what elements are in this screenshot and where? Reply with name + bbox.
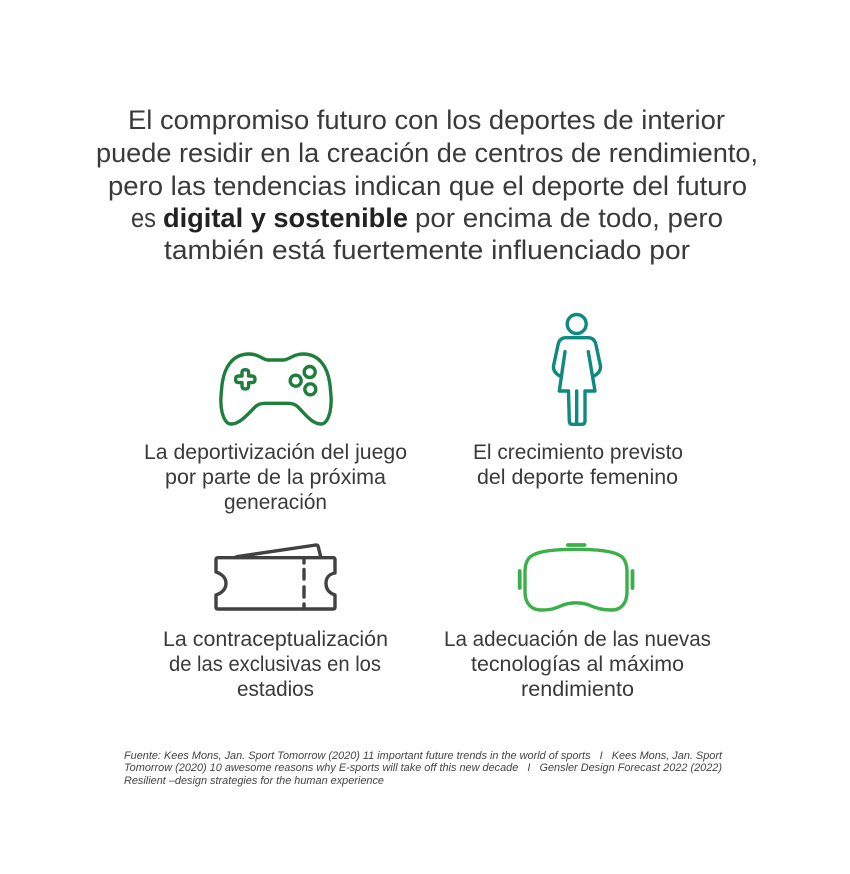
label: new technologies: rendimiento: [521, 678, 634, 701]
title paragraph: también está fuertemente influenciado por: [164, 235, 690, 265]
label: stadium exclusives: La contraceptualización: [163, 628, 388, 651]
icon: VR headset: [520, 545, 632, 610]
icon: ticket: [216, 545, 335, 609]
source footnote: Fuente: Kees Mons, Jan. Sport Tomorrow (2020) 11 important future trends in the world of sports I Kees Mons, Jan. Sport: [124, 750, 723, 762]
label: game generation: generación: [224, 491, 327, 514]
source footnote: Resilient –design strategies for the human experience: [124, 775, 384, 787]
label: game generation: por parte de la próxima: [165, 466, 386, 489]
label: women's sport: El crecimiento previsto: [473, 441, 683, 464]
title paragraph: por encima de todo, pero: [415, 203, 723, 233]
label: new technologies: [444, 628, 711, 701]
title paragraph: [96, 105, 758, 265]
title paragraph: pero las tendencias indican que el deporte del futuro: [108, 171, 747, 201]
title paragraph: es: [131, 203, 156, 233]
label: women's sport: [473, 441, 683, 489]
icon: game controller: [221, 354, 331, 424]
source footnote: [124, 750, 723, 787]
label: stadium exclusives: estadios: [237, 678, 314, 701]
label: women's sport: del deporte femenino: [477, 466, 678, 489]
title paragraph: puede residir en la creación de centros de rendimiento,: [96, 138, 758, 168]
label: stadium exclusives: [163, 628, 388, 701]
label: new technologies: tecnologías al máximo: [471, 653, 684, 676]
label: game generation: La deportivización del juego: [144, 441, 407, 464]
label: stadium exclusives: de las exclusivas en los: [169, 653, 381, 676]
label: game generation: [144, 441, 407, 514]
icon: woman figure: [553, 314, 601, 424]
title paragraph: El compromiso futuro con los deportes de interior: [128, 105, 725, 135]
title paragraph: digital y sostenible: [163, 203, 408, 233]
source footnote: Tomorrow (2020) 10 awesome reasons why E-sports will take off this new decade I Gensler Design Forecast 2022 (2022): [124, 762, 722, 774]
label: new technologies: La adecuación de las nuevas: [444, 628, 711, 651]
